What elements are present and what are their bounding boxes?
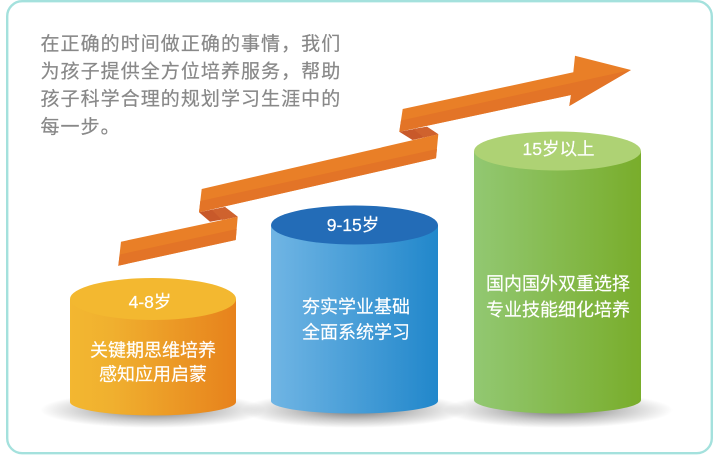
ground shadows <box>40 392 673 428</box>
cylinder: 9-15岁: 全面系统学习 <box>302 322 410 342</box>
intro text: 为孩子提供全方位培养服务，帮助 <box>40 60 341 82</box>
cylinder: 15岁以上: 专业技能细化培养 <box>486 300 630 320</box>
cylinder: 15岁以上 <box>474 132 641 414</box>
intro text <box>40 33 341 138</box>
intro text: 每一步。 <box>40 116 121 138</box>
cylinder: 9-15岁: 9-15岁 <box>327 215 379 235</box>
cylinder: 4-8岁: 4-8岁 <box>129 292 171 312</box>
cylinder: 15岁以上: 15岁以上 <box>523 139 594 159</box>
cylinder: 4-8岁 <box>70 278 236 416</box>
cylinder: 9-15岁: 夯实学业基础 <box>302 297 410 317</box>
intro text: 孩子科学合理的规划学习生涯中的 <box>40 88 341 110</box>
cylinder: 4-8岁: 感知应用启蒙 <box>99 364 207 384</box>
cylinder: 4-8岁: 关键期思维培养 <box>90 340 216 360</box>
intro text: 在正确的时间做正确的事情，我们 <box>40 33 341 55</box>
cylinder: 15岁以上: 国内国外双重选择 <box>486 274 630 294</box>
rising arrow <box>118 56 631 266</box>
cylinder: 9-15岁 <box>271 206 438 414</box>
